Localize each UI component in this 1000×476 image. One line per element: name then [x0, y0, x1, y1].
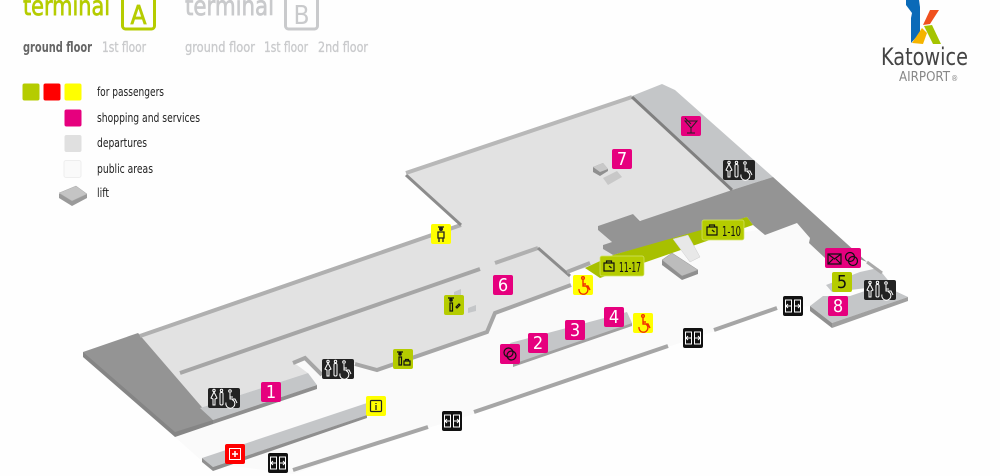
lift near 7: [593, 163, 622, 185]
baggage claim 11-17: [600, 256, 644, 276]
baggage claim 1-10: [702, 220, 744, 240]
legend: lift: [97, 186, 109, 200]
icon: customs baggage: [393, 349, 413, 369]
badge 3: 3: [570, 320, 580, 341]
legend and headings: [22, 0, 369, 206]
floor plan: [83, 84, 908, 474]
departures hall: [138, 96, 732, 408]
legend: departures: [97, 136, 147, 150]
badge 4: 4: [609, 307, 619, 328]
icon: passport control: [444, 295, 464, 315]
badge 1: 1: [266, 382, 276, 403]
floor links: 1st floor: [102, 40, 147, 56]
heading: terminal B: [185, 0, 318, 31]
icon: mail and coins: [825, 248, 861, 268]
shop block 2-4: [510, 312, 632, 367]
icon: security person: [431, 224, 451, 244]
badge 6: 6: [498, 275, 508, 296]
counter block info: [202, 403, 367, 471]
badge 2: 2: [533, 333, 543, 354]
legend: [22, 84, 200, 206]
baggage claim 11-17: 11-17: [619, 261, 641, 276]
badge 7: 7: [617, 149, 627, 170]
legend: shopping and services: [97, 111, 200, 125]
icon: wheelchair: [573, 275, 593, 295]
lift central: [662, 253, 698, 280]
icon: door 1: [268, 453, 288, 473]
legend: for passengers: [97, 85, 164, 99]
stairs central: [673, 235, 700, 262]
icon: coins: [500, 344, 520, 364]
shop block 1: [200, 373, 317, 424]
icon: cocktail: [681, 116, 701, 136]
upper lounge strip: [632, 84, 773, 190]
icon: toilets middle: [322, 359, 354, 379]
badge 7: [612, 149, 632, 170]
baggage belt: [585, 217, 753, 278]
icon: door 2: [442, 411, 462, 431]
icon: information: [366, 396, 386, 416]
badge 5: 5: [837, 272, 847, 293]
floor links: [23, 40, 369, 56]
notch in hall: [293, 357, 322, 385]
small columns: [454, 289, 476, 313]
icon: door 4: [783, 296, 803, 316]
badge 8: 8: [833, 296, 843, 317]
floor links: ground floor: [23, 40, 93, 56]
logo: Katowice: [881, 43, 968, 71]
icon: door 3: [683, 328, 703, 348]
logo: [881, 0, 968, 85]
heading: terminal A: A: [130, 1, 146, 31]
badge 4: [604, 307, 624, 328]
logo: AIRPORT: [899, 70, 951, 85]
legend: public areas: [97, 162, 153, 176]
icon: wheelchair right: [633, 313, 653, 333]
outer glazing walls: [293, 308, 777, 470]
badge 1: [261, 382, 281, 403]
icon: first aid: [225, 444, 245, 464]
icon: toilets left: [208, 388, 240, 408]
public areas: [175, 223, 880, 474]
floor links: 1st floor: [264, 40, 309, 56]
dark block left: [83, 333, 213, 437]
badge 2: [528, 333, 548, 354]
icon: toilets upper: [723, 160, 755, 180]
floor links: 2nd floor: [318, 40, 369, 56]
badge 8: [828, 296, 848, 317]
dark service zone right: [598, 177, 867, 262]
badge 5: [832, 272, 852, 293]
walls: [140, 97, 732, 375]
floor links: ground floor: [185, 40, 256, 56]
baggage claim 1-10: 1-10: [722, 225, 741, 240]
heading: terminal A: [23, 0, 154, 31]
block 8: [810, 262, 908, 328]
logo: ®: [951, 74, 958, 83]
heading: terminal B: B: [293, 1, 310, 31]
icon: toilets right: [864, 280, 896, 300]
badge 3: [565, 320, 585, 341]
badge 6: [493, 275, 513, 296]
